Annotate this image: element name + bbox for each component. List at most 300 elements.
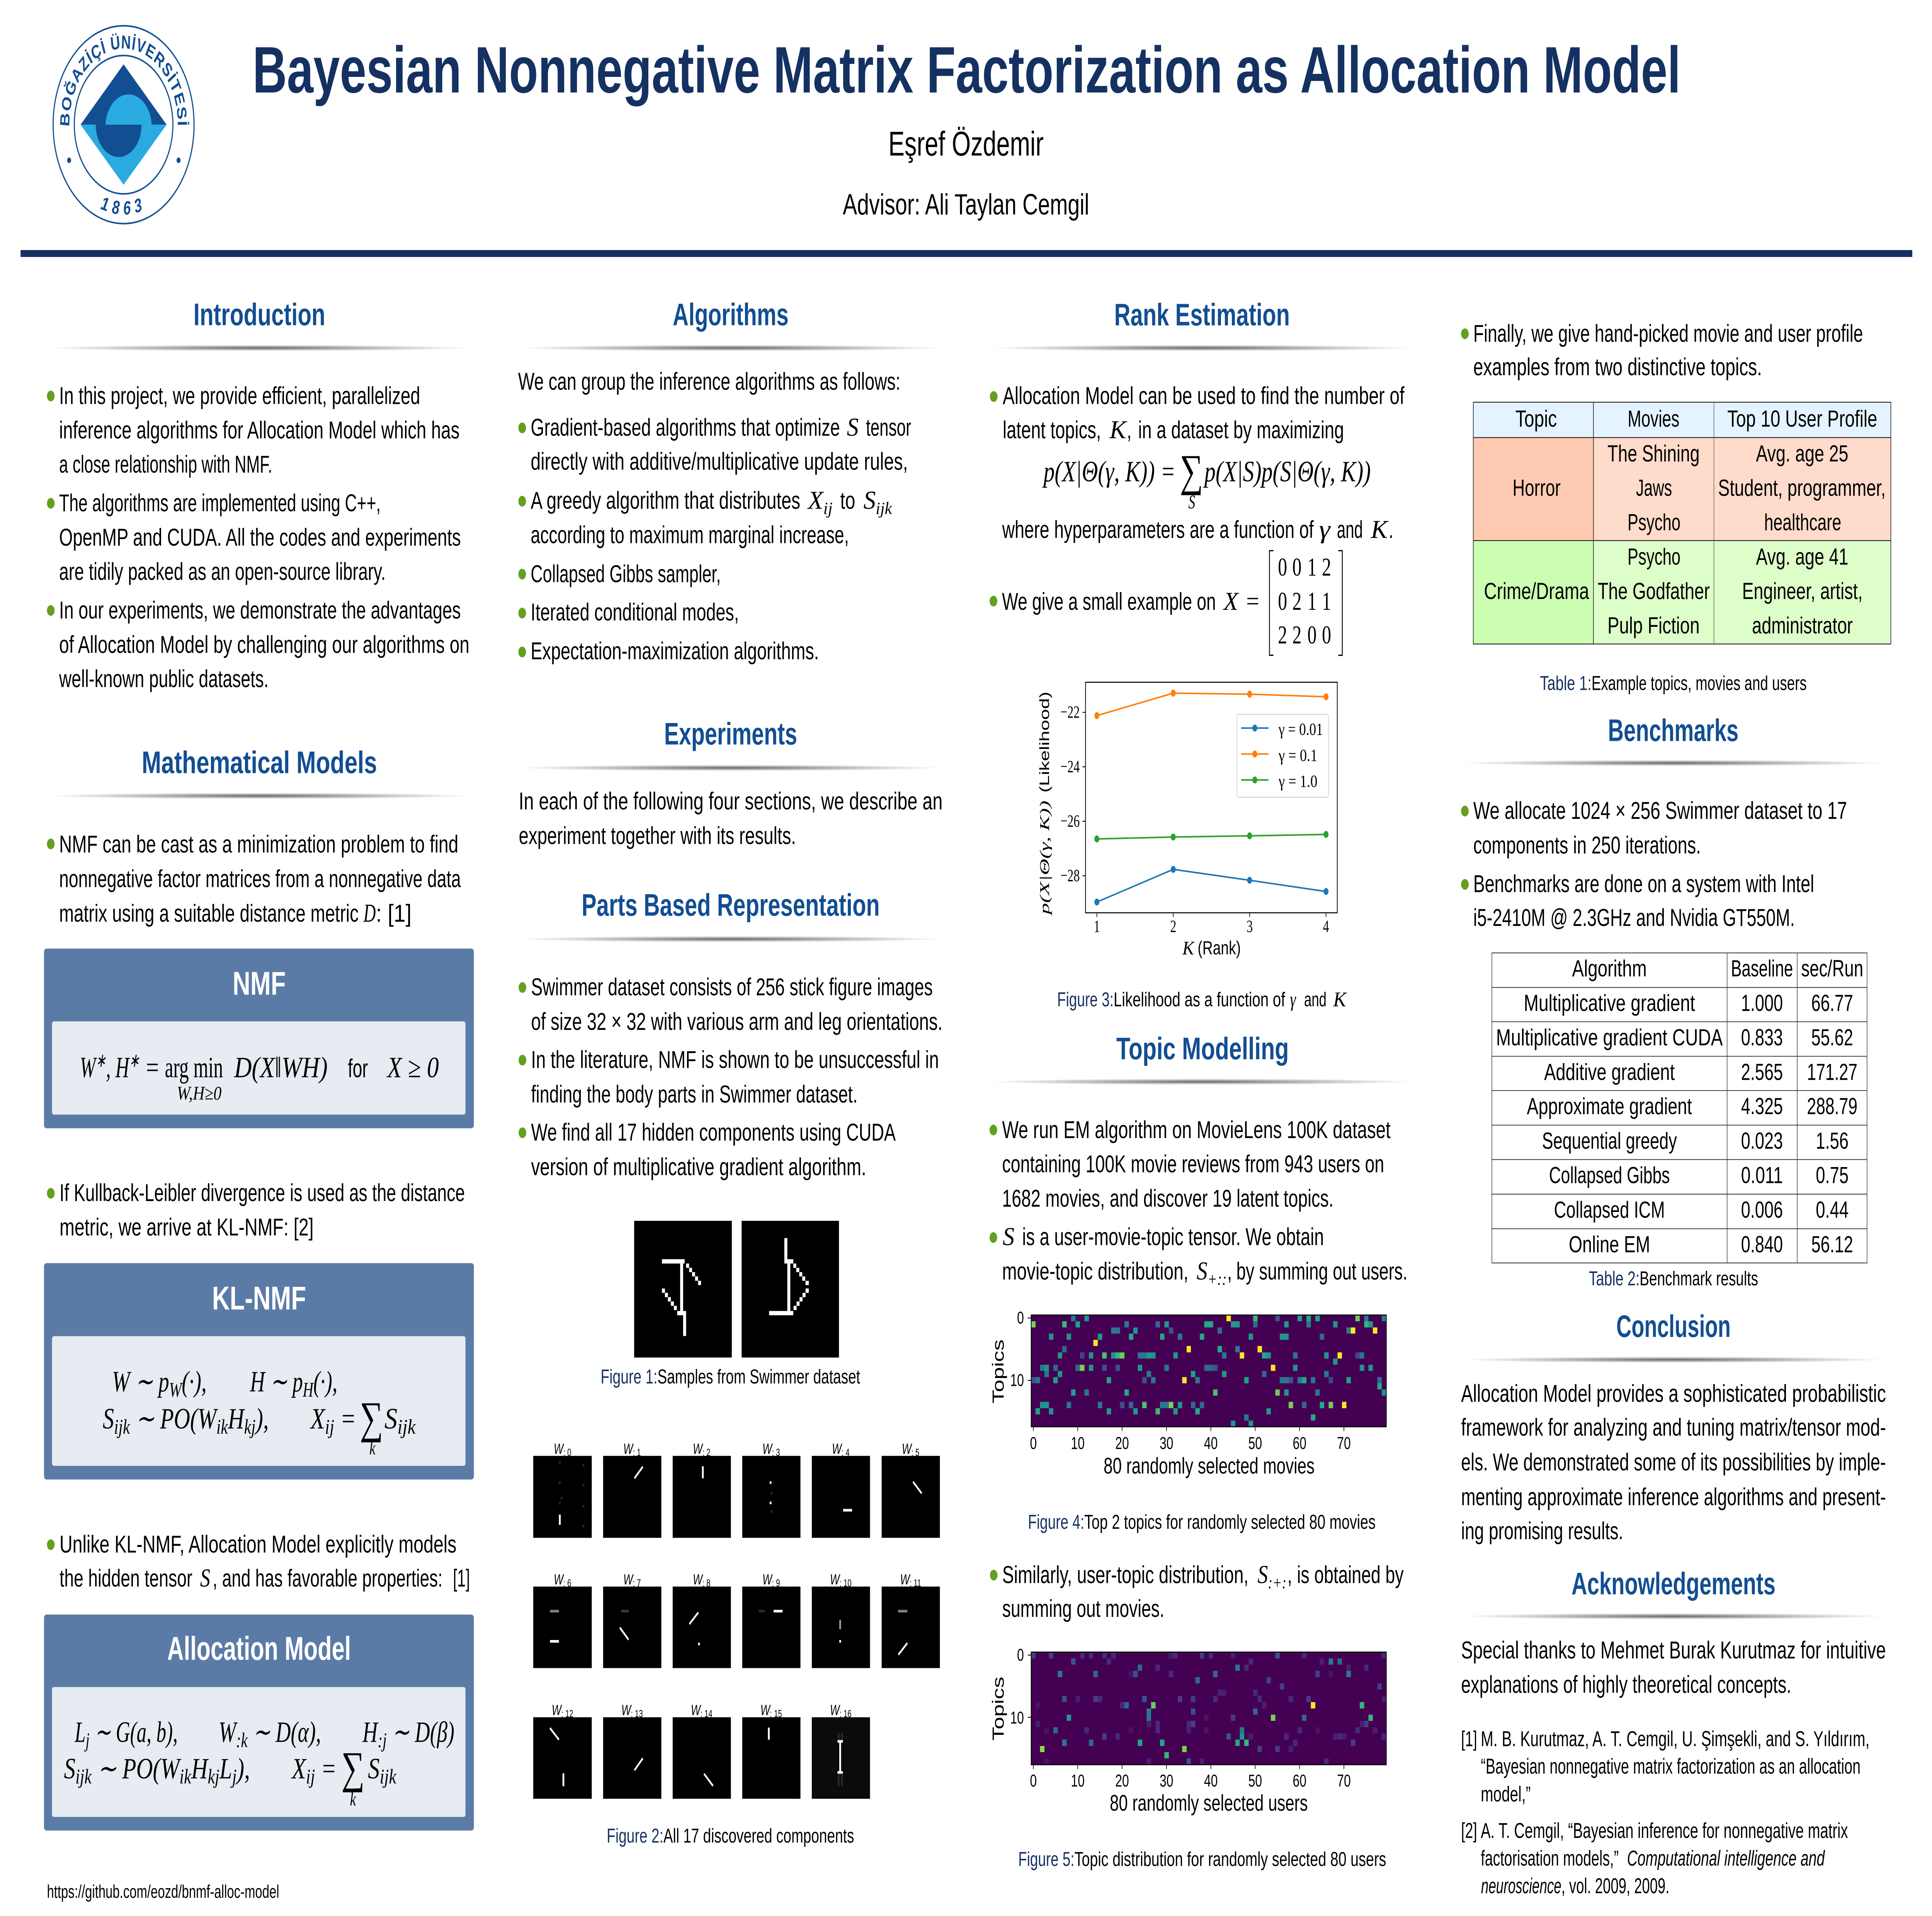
- table 1: example topics: administrator: [1752, 613, 1853, 639]
- text: topic modelling bullets: S: [1003, 1222, 1014, 1251]
- caption: table 1: Example topics, movies and users: [1592, 673, 1807, 694]
- table 2: benchmark results: Sequential greedy: [1542, 1128, 1677, 1154]
- heatmap: movie-topic: 20: [1115, 1434, 1129, 1453]
- table 2: benchmark results: 56.12: [1811, 1232, 1853, 1257]
- block: NMF: [44, 949, 474, 1128]
- heatmap: user-topic: 30: [1160, 1771, 1173, 1790]
- text: algorithm list: S: [864, 486, 873, 515]
- text: topic modelling bullets: containing 100K movie reviews from 943 users on: [1002, 1150, 1384, 1178]
- caption: figure 3: [1057, 988, 1347, 1011]
- text: rank estimation bullet: in a dataset by maximizing: [1138, 417, 1344, 444]
- text: intro bullets: [47, 382, 469, 693]
- text: algorithm list: according to maximum marginal increase,: [531, 521, 849, 548]
- table 2: benchmark results: 1.56: [1816, 1128, 1849, 1154]
- text: rank estimation bullet: ,: [1127, 417, 1132, 444]
- figure 2: 17 discovered components: : 6: [563, 1577, 571, 1589]
- text: algorithm list: Gradient-based algorithms that optimize: [531, 414, 840, 441]
- heatmap: movie-topic: 70: [1337, 1434, 1351, 1453]
- formula: NMF objective: W,H≥0: [177, 1083, 221, 1104]
- text: topic modelling bullets: ,: [1227, 1258, 1232, 1285]
- text: acknowledgements: [1461, 1637, 1886, 1698]
- formula: NMF objective: arg min: [165, 1052, 223, 1084]
- formula: NMF objective: X ≥ 0: [386, 1052, 439, 1084]
- legend: γ = 1.0: [1278, 772, 1317, 791]
- text: hyperparameters: where hyperparameters are a function of: [1002, 516, 1314, 543]
- advisor: Advisor: Ali Taylan Cemgil: [843, 188, 1089, 221]
- text: conclusion: framework for analyzing and tuning matrix/tensor mod-: [1461, 1414, 1886, 1441]
- formula: Allocation Model: ijk: [380, 1765, 397, 1788]
- heatmap: movie-topic: 30: [1160, 1434, 1173, 1453]
- text: user-topic bullet: :+:: [1268, 1573, 1286, 1592]
- table 2: benchmark results: 0.023: [1741, 1128, 1783, 1154]
- formula: Allocation Model: [64, 1716, 454, 1810]
- table 1: example topics: Engineer, artist,: [1742, 579, 1862, 604]
- text: algorithm list: Iterated conditional modes,: [531, 599, 739, 626]
- formula: Allocation Model: X: [292, 1753, 304, 1785]
- text: algorithm list: Expectation-maximization algorithms.: [531, 637, 819, 665]
- references: Computational intelligence and: [1627, 1846, 1825, 1870]
- table 2: benchmark results: 0.840: [1741, 1232, 1783, 1257]
- table 1: example topics: Psycho: [1628, 510, 1680, 536]
- figure 2: 17 discovered components: : 15: [770, 1708, 782, 1720]
- text: intro bullets: The algorithms are implemented using C++,: [59, 489, 381, 517]
- panel: Introduction: [47, 297, 471, 693]
- heatmap: user-topic: 0: [1030, 1771, 1037, 1790]
- text: small example with matrix: We give a small example on: [1002, 588, 1216, 615]
- url: https://github.com/eozd/bnmf-alloc-model: [47, 1881, 279, 1902]
- caption: figure 2: Figure 2:: [607, 1825, 663, 1847]
- figure 2: 17 discovered components: W: [832, 1440, 842, 1457]
- heading: Parts Based Representation: Parts Based Representation: [582, 888, 880, 922]
- line chart: likelihood vs K: 2: [1170, 917, 1176, 936]
- line chart: likelihood vs K: 4: [1323, 917, 1329, 936]
- formula: Allocation Model: W: [219, 1716, 236, 1749]
- text: swimmer bullets: In the literature, NMF is shown to be unsuccessful in: [531, 1046, 939, 1073]
- formula: Allocation Model: j: [84, 1729, 90, 1752]
- text: conclusion: Allocation Model provides a sophisticated probabilistic: [1461, 1380, 1886, 1407]
- line chart: likelihood vs K: 3: [1247, 917, 1253, 936]
- text: conclusion: ing promising results.: [1461, 1517, 1623, 1545]
- heading: Acknowledgements: Acknowledgements: [1571, 1566, 1776, 1601]
- text: NMF description: D: [363, 898, 376, 927]
- heatmap: user-topic: 10: [1071, 1771, 1085, 1790]
- caption: table 2: Benchmark results: [1639, 1268, 1758, 1290]
- figure 2: 17 discovered components: W: [554, 1571, 563, 1588]
- text: algorithm list: [518, 368, 911, 665]
- text: swimmer bullets: Swimmer dataset consists of 256 stick figure images: [531, 973, 933, 1001]
- table 2: benchmark results: 0.833: [1741, 1025, 1783, 1051]
- formula: KL-NMF model: H ∼ p: [250, 1366, 304, 1398]
- table 1: example topics: Horror: [1513, 475, 1561, 501]
- text: NMF description: nonnegative factor matrices from a nonnegative data: [59, 865, 461, 893]
- line chart: likelihood vs K: (Rank): [1197, 938, 1241, 959]
- text: small example with matrix: 1: [1307, 587, 1316, 616]
- line chart: likelihood vs K: −26: [1060, 812, 1080, 830]
- formula: Allocation Model: L: [75, 1716, 86, 1749]
- table 2: benchmark results: 288.79: [1807, 1094, 1857, 1120]
- text: small example with matrix: 0: [1278, 552, 1287, 581]
- logo: Boğaziçi University seal: BOĞAZİÇİ ÜNİVERSİTESİ: [57, 31, 190, 127]
- text: hand-picked examples bullet: examples from two distinctive topics.: [1473, 354, 1762, 381]
- table 2: benchmark results: 55.62: [1811, 1025, 1853, 1051]
- heatmap: user-topic: 40: [1204, 1771, 1218, 1790]
- line chart: likelihood vs K: −24: [1060, 757, 1080, 776]
- references: M. B. Kurutmaz, A. T. Cemgil, U. Şimşekli, and S. Yıldırım,: [1481, 1727, 1869, 1751]
- text: user-topic bullet: summing out movies.: [1002, 1595, 1164, 1622]
- figure 2: 17 discovered components: W: [623, 1440, 633, 1457]
- text: topic modelling bullets: We run EM algorithm on MovieLens 100K dataset: [1002, 1116, 1391, 1143]
- legend: γ = 0.1: [1278, 746, 1317, 765]
- table 1: example topics: The Godfather: [1598, 579, 1710, 604]
- line chart: likelihood vs K: −28: [1060, 866, 1080, 885]
- panel: Parts Based Representation: [519, 888, 942, 1847]
- text: KL divergence bullet: metric, we arrive at KL-NMF: [2]: [60, 1214, 314, 1241]
- formula: KL-NMF model: ijk: [114, 1416, 130, 1439]
- caption: figure 3: γ: [1290, 988, 1296, 1011]
- caption: figure 1: Samples from Swimmer dataset: [658, 1366, 861, 1388]
- formula: likelihood: p(X|S)p(S|Θ(γ, K)): [1203, 456, 1371, 488]
- formula: likelihood: p(X|Θ(γ, K)) =: [1042, 456, 1175, 488]
- text: algorithm list: ij: [823, 499, 833, 518]
- text: Allocation Model bullet: Unlike KL-NMF, Allocation Model explicitly models: [60, 1531, 456, 1558]
- text: rank estimation bullet: K: [1109, 415, 1128, 444]
- references: [2]: [1461, 1819, 1477, 1843]
- heatmap: movie-topic: [989, 1309, 1386, 1478]
- text: small example with matrix: 1: [1307, 552, 1316, 581]
- text: rank estimation bullet: latent topics,: [1003, 417, 1101, 444]
- text: small example with matrix: 1: [1322, 587, 1331, 616]
- table 1: example topics: Crime/Drama: [1484, 579, 1589, 604]
- text: experiments intro: In each of the following four sections, we describe an: [519, 788, 942, 815]
- block: KL-NMF: [44, 1263, 474, 1479]
- text: Allocation Model bullet: [60, 1531, 470, 1592]
- text: user-topic bullet: S: [1257, 1560, 1267, 1589]
- figure 2: 17 discovered components: W: [693, 1571, 702, 1588]
- text: hyperparameters: γ: [1319, 515, 1331, 544]
- text: KL divergence bullet: If Kullback-Leibler divergence is used as the distance: [60, 1179, 465, 1206]
- formula: NMF objective: ∗: [96, 1050, 106, 1071]
- table 2: benchmark results: 0.75: [1816, 1162, 1849, 1188]
- text: benchmark bullets: i5-2410M @ 2.3GHz and Nvidia GT550M.: [1473, 904, 1795, 931]
- heatmap: movie-topic: 60: [1293, 1434, 1306, 1453]
- table 1: example topics: Movies: [1628, 406, 1679, 432]
- heatmap: movie-topic: 50: [1248, 1434, 1262, 1453]
- panel: Benchmarks: [1461, 713, 1885, 1290]
- caption: figure 3: and: [1304, 989, 1327, 1011]
- table 1: example topics: The Shining: [1607, 441, 1700, 467]
- heatmap: user-topic: 80 randomly selected users: [1110, 1790, 1308, 1816]
- figure 2: 17 discovered components: W: [760, 1702, 770, 1718]
- panel: Rank Estimation: [990, 298, 1413, 1011]
- figure 2: 17 discovered components: W: [621, 1702, 631, 1718]
- text: small example with matrix: 2: [1322, 552, 1331, 581]
- text: rank estimation bullet: [990, 382, 1405, 444]
- formula: Allocation Model: =: [315, 1753, 337, 1785]
- series: gamma 0.1: [1094, 690, 1328, 719]
- figure 2: 17 discovered components: W: [691, 1702, 701, 1718]
- heatmap: movie-topic: 40: [1204, 1434, 1218, 1453]
- text: acknowledgements: Special thanks to Mehmet Burak Kurutmaz for intuitive: [1461, 1637, 1886, 1664]
- table 2: benchmark results: 0.011: [1741, 1162, 1783, 1188]
- text: Allocation Model bullet: S: [200, 1564, 210, 1592]
- references: factorisation models,”: [1481, 1846, 1619, 1870]
- text: swimmer bullets: We find all 17 hidden components using CUDA: [531, 1119, 896, 1146]
- table 2: benchmark results: Approximate gradient: [1527, 1094, 1692, 1120]
- formula: Allocation Model: ),: [235, 1753, 250, 1785]
- formula: Allocation Model: ∼ PO(W: [92, 1753, 182, 1785]
- series: gamma 0.01: [1094, 866, 1328, 905]
- formula: Allocation Model: H: [362, 1716, 378, 1749]
- table 2: benchmark results: Collapsed Gibbs: [1549, 1162, 1670, 1188]
- text: topic modelling bullets: 1682 movies, and discover 19 latent topics.: [1002, 1185, 1333, 1212]
- formula: NMF objective: , H: [106, 1052, 130, 1084]
- figure 2: 17 discovered components: : 1: [633, 1446, 641, 1458]
- figure 2: 17 discovered components: W: [900, 1571, 910, 1588]
- panel: Experiments: [519, 716, 942, 849]
- heatmap: user-topic: 10: [1010, 1708, 1024, 1727]
- text: benchmark bullets: Benchmarks are done on a system with Intel: [1473, 870, 1814, 897]
- panel: Algorithms: [518, 297, 942, 665]
- figure 2: 17 discovered components: W: [552, 1702, 561, 1718]
- references: “Bayesian nonnegative matrix factorization as an allocation: [1481, 1754, 1861, 1778]
- references: A. T. Cemgil, “Bayesian inference for nonnegative matrix: [1481, 1819, 1848, 1843]
- table 2: benchmark results: Online EM: [1569, 1232, 1650, 1257]
- text: small example with matrix: 0: [1322, 620, 1331, 649]
- formula: NMF objective: for: [348, 1054, 368, 1083]
- heading: Topic Modelling: Topic Modelling: [1116, 1031, 1289, 1066]
- line chart: likelihood vs K: 1: [1094, 917, 1100, 936]
- panel: Acknowledgements: [1461, 1566, 1886, 1698]
- line chart: likelihood vs K: −22: [1060, 703, 1080, 722]
- heading: Experiments: Experiments: [664, 716, 797, 751]
- text: NMF description: : [1]: [376, 900, 412, 927]
- text: small example with matrix: 0: [1293, 552, 1301, 581]
- title: Bayesian Nonnegative Matrix Factorization as Allocation Model: [253, 33, 1680, 107]
- figure 2: 17 discovered components: : 4: [842, 1446, 850, 1458]
- heading: Benchmarks: Benchmarks: [1608, 713, 1738, 748]
- text: small example with matrix: =: [1246, 587, 1259, 616]
- text: user-topic bullet: [990, 1560, 1404, 1622]
- caption: figure 3: K: [1333, 988, 1347, 1011]
- text: rank estimation bullet: Allocation Model can be used to find the number of: [1003, 382, 1405, 409]
- figure 2: 17 discovered components: : 7: [633, 1577, 641, 1589]
- table 2: benchmark results: 171.27: [1807, 1059, 1857, 1085]
- panel: Topic Modelling: [989, 1031, 1413, 1870]
- formula: Allocation Model: L: [219, 1753, 232, 1785]
- formula: Allocation Model: :k: [236, 1729, 248, 1752]
- text: algorithm list: to: [840, 487, 855, 514]
- formula: likelihood: S: [1189, 492, 1195, 512]
- line chart: likelihood vs K: K: [1182, 938, 1195, 959]
- formula: KL-NMF model: H: [228, 1403, 245, 1435]
- caption: figure 2: All 17 discovered components: [663, 1825, 854, 1847]
- caption: figure 5: Figure 5:: [1018, 1849, 1075, 1870]
- heading: Introduction: Introduction: [194, 297, 325, 332]
- formula: Allocation Model: ∑: [341, 1742, 365, 1792]
- text: hyperparameters: .: [1389, 516, 1393, 543]
- heading: Algorithms: Algorithms: [673, 297, 789, 332]
- table 2: benchmark results: 4.325: [1741, 1094, 1783, 1120]
- table 1: example topics: Avg. age 41: [1756, 544, 1848, 570]
- text: conclusion: els. We demonstrated some of its possibilities by imple-: [1461, 1449, 1886, 1476]
- table 1: example topics: [1473, 402, 1891, 644]
- text: intro bullets: well-known public datasets.: [59, 665, 269, 693]
- text: algorithm list: directly with additive/multiplicative update rules,: [531, 448, 908, 475]
- formula: Allocation Model: ∼ D(β): [387, 1716, 454, 1749]
- figure 2: 17 discovered components: W: [554, 1440, 563, 1457]
- formula: KL-NMF model: ∼ PO(W: [130, 1403, 218, 1435]
- formula: KL-NMF model: ik: [216, 1416, 228, 1439]
- formula: Allocation Model: ik: [180, 1765, 192, 1788]
- figure 2: 17 discovered components: : 11: [910, 1577, 921, 1589]
- heatmap: user-topic: Topics: [989, 1677, 1007, 1741]
- caption: figure 4: Figure 4:: [1028, 1511, 1084, 1533]
- caption: table 2: Table 2:: [1589, 1268, 1639, 1290]
- formula: Allocation Model: ijk: [75, 1765, 92, 1788]
- figure 2: 17 discovered components: : 2: [702, 1446, 711, 1458]
- heatmap: movie-topic: 10: [1071, 1434, 1085, 1453]
- text: topic modelling bullets: by summing out users.: [1236, 1258, 1408, 1285]
- formula: Allocation Model: ij: [306, 1765, 315, 1788]
- table 1: example topics: Psycho: [1628, 544, 1680, 570]
- formula: NMF objective: [80, 1050, 439, 1104]
- text: algorithm list: A greedy algorithm that distributes: [531, 487, 800, 514]
- figure 2: 17 discovered components: W: [762, 1440, 772, 1457]
- text: small example with matrix: [990, 551, 1342, 655]
- table 2: benchmark results: 66.77: [1811, 990, 1853, 1016]
- text: experiments intro: experiment together with its results.: [519, 822, 796, 849]
- formula: KL-NMF model: (·),: [182, 1366, 207, 1398]
- line chart: likelihood vs K: p(X|Θ(γ, K)): [1037, 801, 1052, 916]
- text: topic modelling bullets: +::: [1208, 1269, 1227, 1289]
- figure 2: 17 discovered components: [533, 1440, 940, 1799]
- formula: likelihood: [1042, 446, 1371, 512]
- references: [1]: [1461, 1727, 1477, 1751]
- formula: KL-NMF model: X: [311, 1403, 323, 1435]
- figure 2: 17 discovered components: : 16: [840, 1708, 852, 1720]
- text: benchmark bullets: We allocate 1024 × 256 Swimmer dataset to 17: [1473, 797, 1847, 824]
- figure 2: 17 discovered components: : 12: [561, 1708, 573, 1720]
- formula: Allocation Model: :j: [378, 1729, 387, 1752]
- formula: Allocation Model: S: [64, 1753, 75, 1785]
- heatmap: movie-topic: Topics: [989, 1339, 1007, 1404]
- table 1: example topics: Pulp Fiction: [1607, 613, 1700, 639]
- caption: figure 3: Figure 3:: [1057, 989, 1114, 1011]
- formula: KL-NMF model: ij: [325, 1416, 334, 1439]
- formula: KL-NMF model: ijk: [397, 1416, 416, 1439]
- text: conclusion: menting approximate inference algorithms and present-: [1461, 1484, 1886, 1511]
- heading: Rank Estimation: Rank Estimation: [1114, 298, 1290, 332]
- text: topic modelling bullets: S: [1197, 1256, 1206, 1285]
- table 1: example topics: Avg. age 25: [1756, 441, 1848, 467]
- text: small example with matrix: 2: [1293, 620, 1301, 649]
- formula: KL-NMF model: H: [303, 1378, 314, 1402]
- text: small example with matrix: 0: [1278, 587, 1287, 616]
- figure 2: 17 discovered components: W: [830, 1571, 840, 1588]
- table 1: example topics: Top 10 User Profile: [1727, 406, 1877, 432]
- text: NMF description: [59, 831, 461, 927]
- text: algorithm list: We can group the inference algorithms as follows:: [518, 368, 900, 395]
- block: Allocation Model: [44, 1615, 474, 1831]
- formula: NMF objective: ∗: [129, 1050, 139, 1071]
- figure 2: 17 discovered components: : 5: [912, 1446, 919, 1458]
- text: user-topic bullet: , is obtained by: [1287, 1561, 1404, 1588]
- line chart: likelihood vs K: [1037, 682, 1337, 959]
- heatmap: user-topic: 0: [1017, 1645, 1024, 1665]
- text: user-topic bullet: Similarly, user-topic distribution,: [1002, 1561, 1248, 1588]
- formula: KL-NMF model: (·),: [313, 1366, 337, 1398]
- formula: KL-NMF model: ),: [254, 1403, 269, 1435]
- formula: Allocation Model: j: [230, 1765, 236, 1788]
- figure 2: 17 discovered components: W: [830, 1702, 840, 1718]
- text: KL divergence bullet: [60, 1179, 465, 1241]
- text: algorithm list: Collapsed Gibbs sampler,: [531, 560, 721, 587]
- text: benchmark bullets: components in 250 iterations.: [1473, 832, 1701, 859]
- references: [1461, 1727, 1869, 1898]
- figure 2: 17 discovered components: : 0: [563, 1446, 571, 1458]
- formula: KL-NMF model: W: [169, 1378, 183, 1402]
- formula: Allocation Model: ∼ G(a, b),: [90, 1716, 178, 1749]
- legend: [1237, 714, 1328, 797]
- table 2: benchmark results: [1492, 953, 1867, 1263]
- table 2: benchmark results: Multiplicative gradient: [1524, 990, 1695, 1016]
- references: model,”: [1481, 1782, 1531, 1806]
- figure 2: 17 discovered components: W: [762, 1571, 772, 1588]
- figure 2: 17 discovered components: : 10: [840, 1577, 852, 1589]
- caption: table 2: [1589, 1268, 1758, 1290]
- formula: Allocation Model: k: [350, 1789, 356, 1810]
- figure 2: 17 discovered components: : 9: [772, 1577, 780, 1589]
- table 2: benchmark results: sec/Run: [1801, 956, 1863, 982]
- formula: KL-NMF model: k: [369, 1438, 376, 1459]
- text: Allocation Model bullet: , and has favorable properties:: [213, 1565, 442, 1592]
- text: intro bullets: In this project, we provide efficient, parallelized: [59, 382, 420, 409]
- references: neuroscience: [1481, 1874, 1561, 1898]
- table 2: benchmark results: 0.44: [1816, 1197, 1849, 1223]
- text: intro bullets: inference algorithms for Allocation Model which has: [59, 417, 459, 444]
- text: algorithm list: ijk: [876, 499, 892, 518]
- heatmap: user-topic: 50: [1248, 1771, 1262, 1790]
- figure 2: 17 discovered components: W: [902, 1440, 912, 1457]
- text: swimmer bullets: of size 32 × 32 with various arm and leg orientations.: [531, 1008, 942, 1035]
- table 1: example topics: Jaws: [1636, 475, 1672, 501]
- figure 2: 17 discovered components: : 8: [702, 1577, 711, 1589]
- text: intro bullets: of Allocation Model by challenging our algorithms on: [59, 631, 469, 658]
- heading: Mathematical Models: Mathematical Models: [142, 745, 377, 780]
- text: small example with matrix: 0: [1307, 620, 1316, 649]
- text: experiments intro: [519, 788, 942, 849]
- formula: KL-NMF model: =: [334, 1403, 356, 1435]
- text: hand-picked examples bullet: [1461, 320, 1863, 381]
- text: NMF description: matrix using a suitable distance metric: [59, 900, 359, 927]
- formula: NMF objective: =: [146, 1052, 159, 1084]
- text: hand-picked examples bullet: Finally, we give hand-picked movie and user profile: [1473, 320, 1863, 347]
- text: swimmer bullets: finding the body parts in Swimmer dataset.: [531, 1081, 857, 1108]
- logo: Boğaziçi University seal: [53, 26, 194, 224]
- text: conclusion: [1461, 1380, 1886, 1545]
- text: algorithm list: tensor: [866, 414, 911, 441]
- logo: Boğaziçi University seal: 1863: [99, 192, 148, 220]
- caption: figure 4: Top 2 topics for randomly selected 80 movies: [1084, 1511, 1376, 1533]
- text: acknowledgements: explanations of highly theoretical concepts.: [1461, 1671, 1791, 1698]
- formula: Allocation Model: kj: [208, 1765, 219, 1788]
- line chart: likelihood vs K: (Likelihood): [1037, 692, 1052, 793]
- text: intro bullets: OpenMP and CUDA. All the codes and experiments: [59, 524, 461, 551]
- figure 2: 17 discovered components: W: [693, 1440, 702, 1457]
- panel: Mathematical Models: [44, 745, 474, 1831]
- heatmap: movie-topic: 0: [1017, 1309, 1024, 1327]
- legend: γ = 0.01: [1278, 720, 1323, 739]
